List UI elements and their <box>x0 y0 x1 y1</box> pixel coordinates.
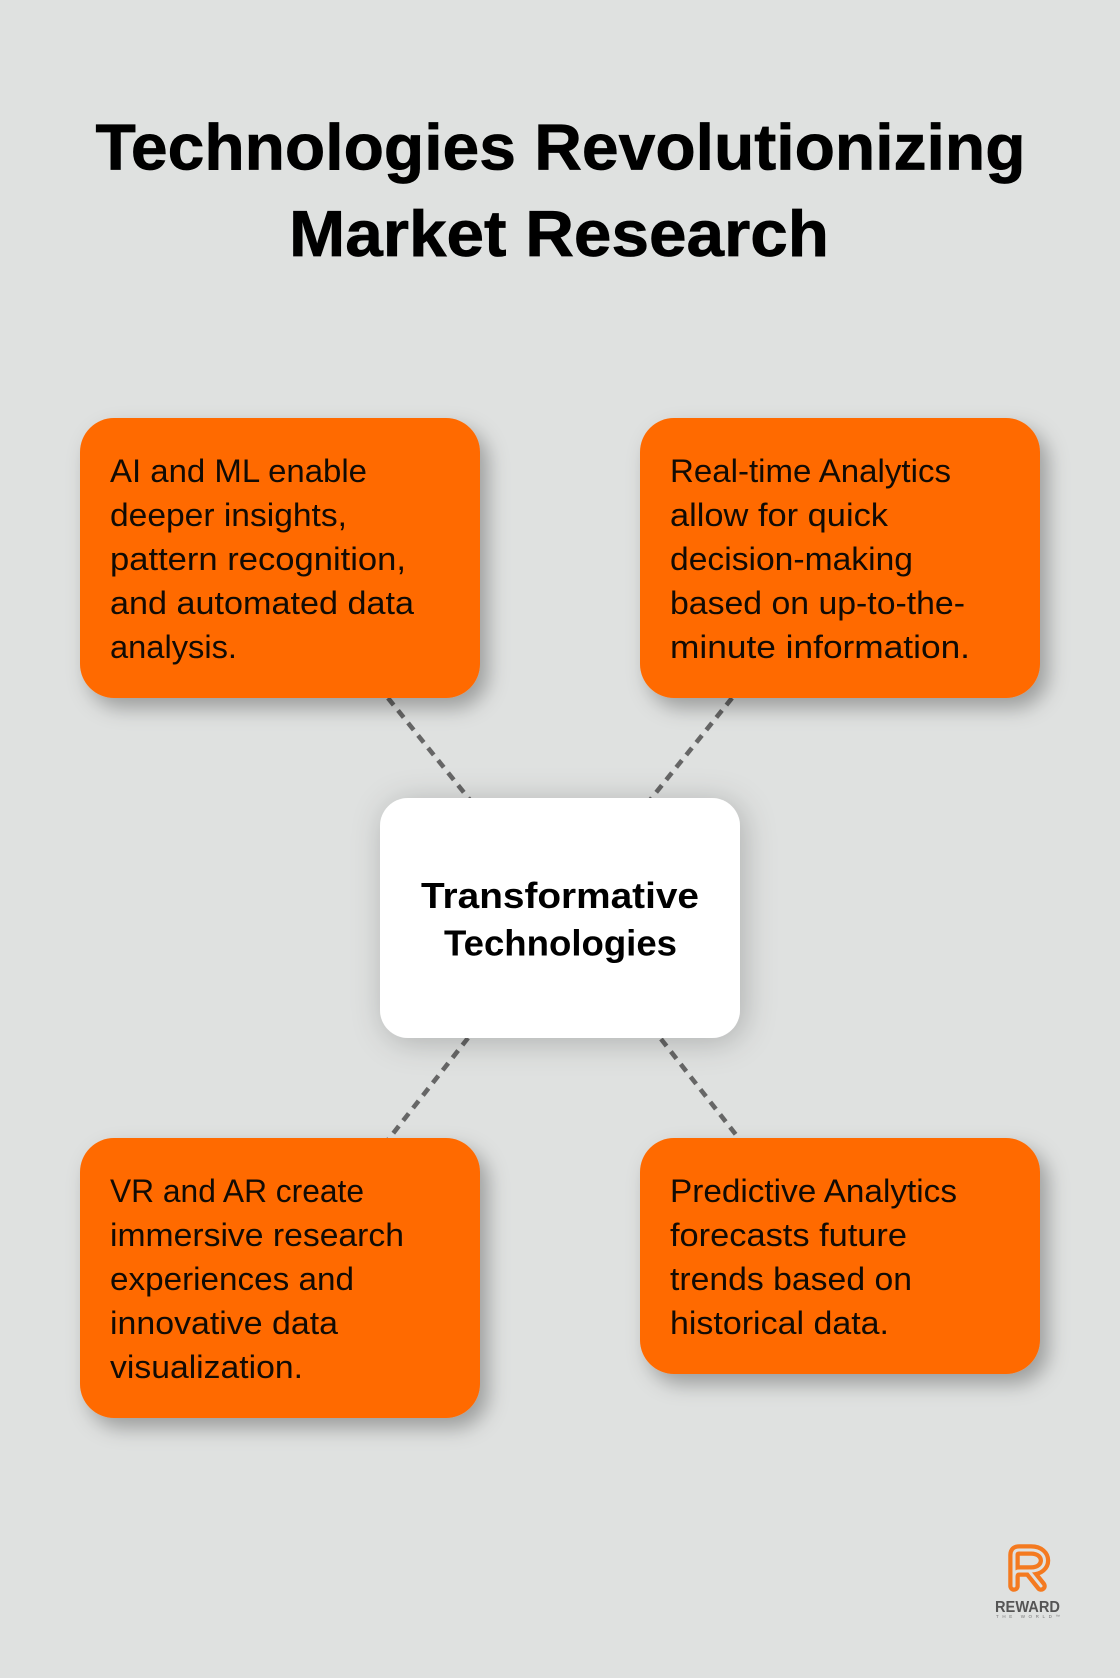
panel: Predictive Analytics: forecasts future <box>670 1217 907 1253</box>
panel: AI and ML <box>80 418 480 698</box>
panel: Real-time Analytics <box>640 418 1040 698</box>
panel: AI and ML: analysis. <box>110 629 237 665</box>
icon: ribbon letter R <box>1014 1550 1044 1586</box>
panel: Real-time Analytics: Real-time Analytics <box>670 453 951 489</box>
panel: Predictive Analytics: trends based on <box>670 1261 912 1297</box>
connector: top-left box to center <box>388 698 474 805</box>
panel: Real-time Analytics: decision-making <box>670 541 913 577</box>
panel: center Transformative Technologies: Transformative <box>421 875 699 916</box>
logo: Reward the World: THE WORLD™ <box>996 1614 1060 1619</box>
panel: AI and ML: pattern recognition, <box>110 541 406 577</box>
panel: VR and AR <box>80 1138 480 1418</box>
logo: Reward the World: REWARD <box>995 1599 1060 1616</box>
panel: VR and AR: immersive research <box>110 1217 404 1253</box>
panel: center Transformative Technologies <box>380 798 740 1038</box>
title: Technologies Revolutionizing <box>96 110 1026 184</box>
connector: center to bottom-left box <box>384 1038 468 1145</box>
panel: AI and ML: deeper insights, <box>110 497 347 533</box>
panel: VR and AR: innovative data <box>110 1305 339 1341</box>
panel: VR and AR: experiences and <box>110 1261 354 1297</box>
panel: Predictive Analytics <box>640 1138 1040 1374</box>
panel: Predictive Analytics: historical data. <box>670 1305 889 1341</box>
connector: center to bottom-right box <box>661 1039 744 1145</box>
connector: top-right box to center <box>646 698 732 805</box>
panel: VR and AR: VR and AR create <box>110 1173 364 1209</box>
title <box>96 110 1026 270</box>
panel: VR and AR: visualization. <box>110 1349 303 1385</box>
panel: Real-time Analytics: based on up-to-the- <box>670 585 965 621</box>
panel: Predictive Analytics: Predictive Analytics <box>670 1173 957 1209</box>
panel: AI and ML: and automated data <box>110 585 415 621</box>
panel: Real-time Analytics: minute information. <box>670 629 970 665</box>
panel: Real-time Analytics: allow for quick <box>670 497 889 533</box>
panel: AI and ML: AI and ML enable <box>110 453 367 489</box>
panel: center Transformative Technologies: Technologies <box>444 922 677 964</box>
title: Market Research <box>289 197 829 270</box>
logo: Reward the World <box>995 1550 1060 1619</box>
